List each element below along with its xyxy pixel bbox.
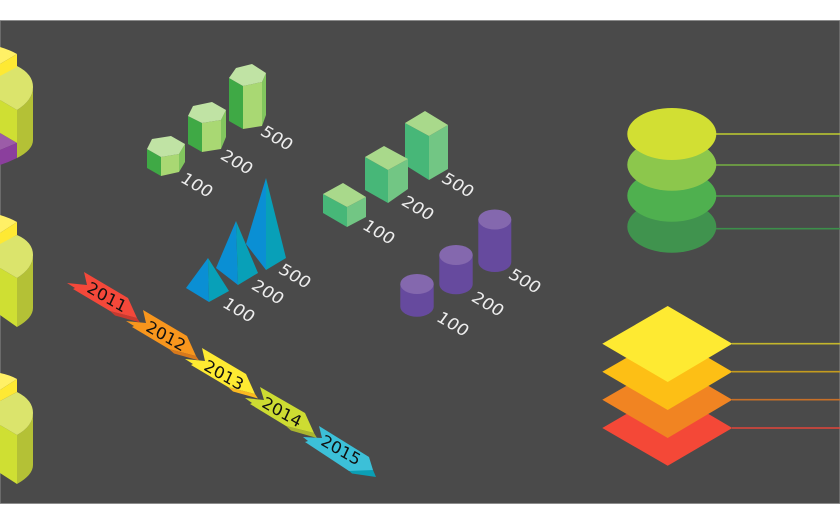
diamond layer 4 xyxy=(602,390,732,466)
hexagon labels: 200 xyxy=(217,146,257,178)
pyramid labels: 500 xyxy=(275,260,315,292)
hexagonal bar 200 xyxy=(188,102,226,152)
cylinder labels: 200 xyxy=(468,288,508,320)
cylinder labels: 100 xyxy=(433,308,473,340)
diamond layer 2 xyxy=(602,334,732,410)
cylinder labels: 500 xyxy=(505,265,545,297)
hexagonal bar 500 xyxy=(229,64,266,129)
hexagon labels xyxy=(177,122,297,201)
pyramid 100 xyxy=(186,258,229,302)
diamond layer 1 xyxy=(602,306,732,382)
ribbon 2012 xyxy=(126,310,199,360)
cube 200 xyxy=(365,146,408,203)
ellipse layer 1 xyxy=(627,108,716,160)
ribbon 2014: 2014 xyxy=(259,393,305,431)
hexagonal bar chart xyxy=(147,64,297,201)
pyramid labels xyxy=(219,260,315,326)
cylinder chart xyxy=(400,210,545,340)
pyramid labels: 100 xyxy=(219,294,259,326)
pyramid 200 xyxy=(216,221,258,285)
ribbon 2011: 2011 xyxy=(84,278,130,316)
cylinder 100 xyxy=(400,274,434,317)
cube labels xyxy=(359,169,478,248)
ribbon 2014 xyxy=(245,387,317,438)
cylinder 500 xyxy=(478,210,511,272)
cylinder 200 xyxy=(439,245,473,294)
cube labels: 100 xyxy=(359,216,399,248)
diamond leader lines xyxy=(732,344,840,428)
ellipse layer 4 xyxy=(627,201,716,253)
pyramid labels: 200 xyxy=(248,276,288,308)
cube chart xyxy=(323,111,478,248)
hexagonal bar 100 xyxy=(147,136,185,176)
pyramid chart xyxy=(186,178,315,326)
stacked ellipses with leader lines xyxy=(627,108,840,253)
ribbon 2013 xyxy=(185,348,258,398)
pyramid 500 xyxy=(246,178,286,270)
diamond layer 3 xyxy=(602,362,732,438)
cube 500 xyxy=(405,111,448,180)
ribbon 2012: 2012 xyxy=(143,317,189,355)
ribbon 2013: 2013 xyxy=(201,356,247,394)
timeline ribbon xyxy=(67,272,376,477)
pie chart 3 xyxy=(0,373,33,484)
pie chart 1 xyxy=(0,47,33,165)
ellipse layer 3 xyxy=(627,170,716,222)
ribbon 2015 xyxy=(303,426,376,477)
ribbon 2015: 2015 xyxy=(318,431,364,469)
hexagon labels: 100 xyxy=(177,169,217,201)
leader lines xyxy=(716,134,840,229)
ribbon 2011 xyxy=(67,272,140,322)
cube labels: 200 xyxy=(398,192,438,224)
cube 100 xyxy=(323,183,366,227)
cube labels: 500 xyxy=(438,169,478,201)
stacked diamonds with leader lines xyxy=(602,306,840,466)
hexagon labels: 500 xyxy=(257,122,297,154)
ellipse layer 2 xyxy=(627,139,716,191)
pie chart 2 xyxy=(0,215,33,327)
cylinder labels xyxy=(433,265,545,340)
